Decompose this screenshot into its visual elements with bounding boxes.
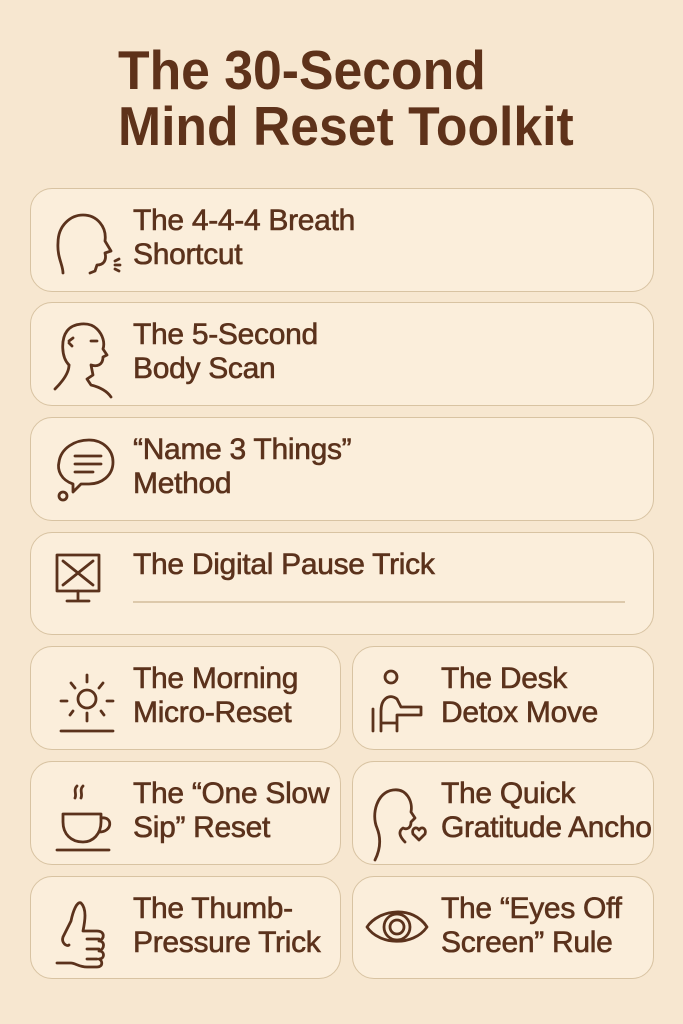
text: Body Scan <box>133 352 275 385</box>
icon: speech bubble <box>57 438 114 502</box>
text: The Desk <box>441 662 567 695</box>
text: Detox Move <box>441 696 598 729</box>
text: Shortcut <box>133 238 242 271</box>
card: thumb pressure <box>30 876 341 979</box>
card: one slow sip <box>30 761 341 865</box>
card: desk detox <box>352 646 654 750</box>
icon: sun <box>60 674 114 732</box>
text: The “Eyes Off <box>441 892 622 925</box>
text <box>133 892 322 959</box>
text <box>133 204 355 271</box>
icon: thumbs up <box>56 901 105 968</box>
card: morning micro-reset <box>30 646 341 750</box>
text: The Morning <box>133 662 298 695</box>
title: The 30-Second <box>118 39 486 101</box>
text: Micro-Reset <box>133 696 291 729</box>
underline bar <box>133 601 625 603</box>
icon: coffee cup <box>56 784 112 852</box>
card: gratitude anchor <box>352 761 654 865</box>
title: Mind Reset Toolkit <box>118 95 574 157</box>
text: The Digital Pause Trick <box>133 548 435 581</box>
text: The 4-4-4 Breath <box>133 204 355 237</box>
text: Method <box>133 467 231 500</box>
text: Pressure Trick <box>133 926 321 959</box>
card: eyes off screen <box>352 876 654 979</box>
icon: person at desk <box>372 670 422 732</box>
text <box>441 892 622 959</box>
text: Screen” Rule <box>441 926 612 959</box>
text: The Quick <box>441 777 575 810</box>
text: The 5-Second <box>133 318 318 351</box>
card: breath shortcut <box>30 188 654 292</box>
text <box>441 662 598 729</box>
text <box>133 777 330 844</box>
text: The “One Slow <box>133 777 329 810</box>
card: name 3 things <box>30 417 654 521</box>
text <box>133 662 298 729</box>
text <box>133 433 351 500</box>
icon: monitor with X <box>56 554 100 602</box>
text: The Thumb- <box>133 892 293 925</box>
title <box>118 39 574 157</box>
text <box>441 777 654 844</box>
icon: eye <box>366 910 428 943</box>
card: body scan <box>30 302 654 406</box>
icon: body outline <box>54 322 112 398</box>
card: digital pause <box>30 532 654 635</box>
text: Sip” Reset <box>133 811 270 844</box>
text: “Name 3 Things” <box>133 433 351 466</box>
icon: head breathing <box>56 214 122 274</box>
text <box>133 318 318 385</box>
icon: head with heart <box>373 788 427 862</box>
